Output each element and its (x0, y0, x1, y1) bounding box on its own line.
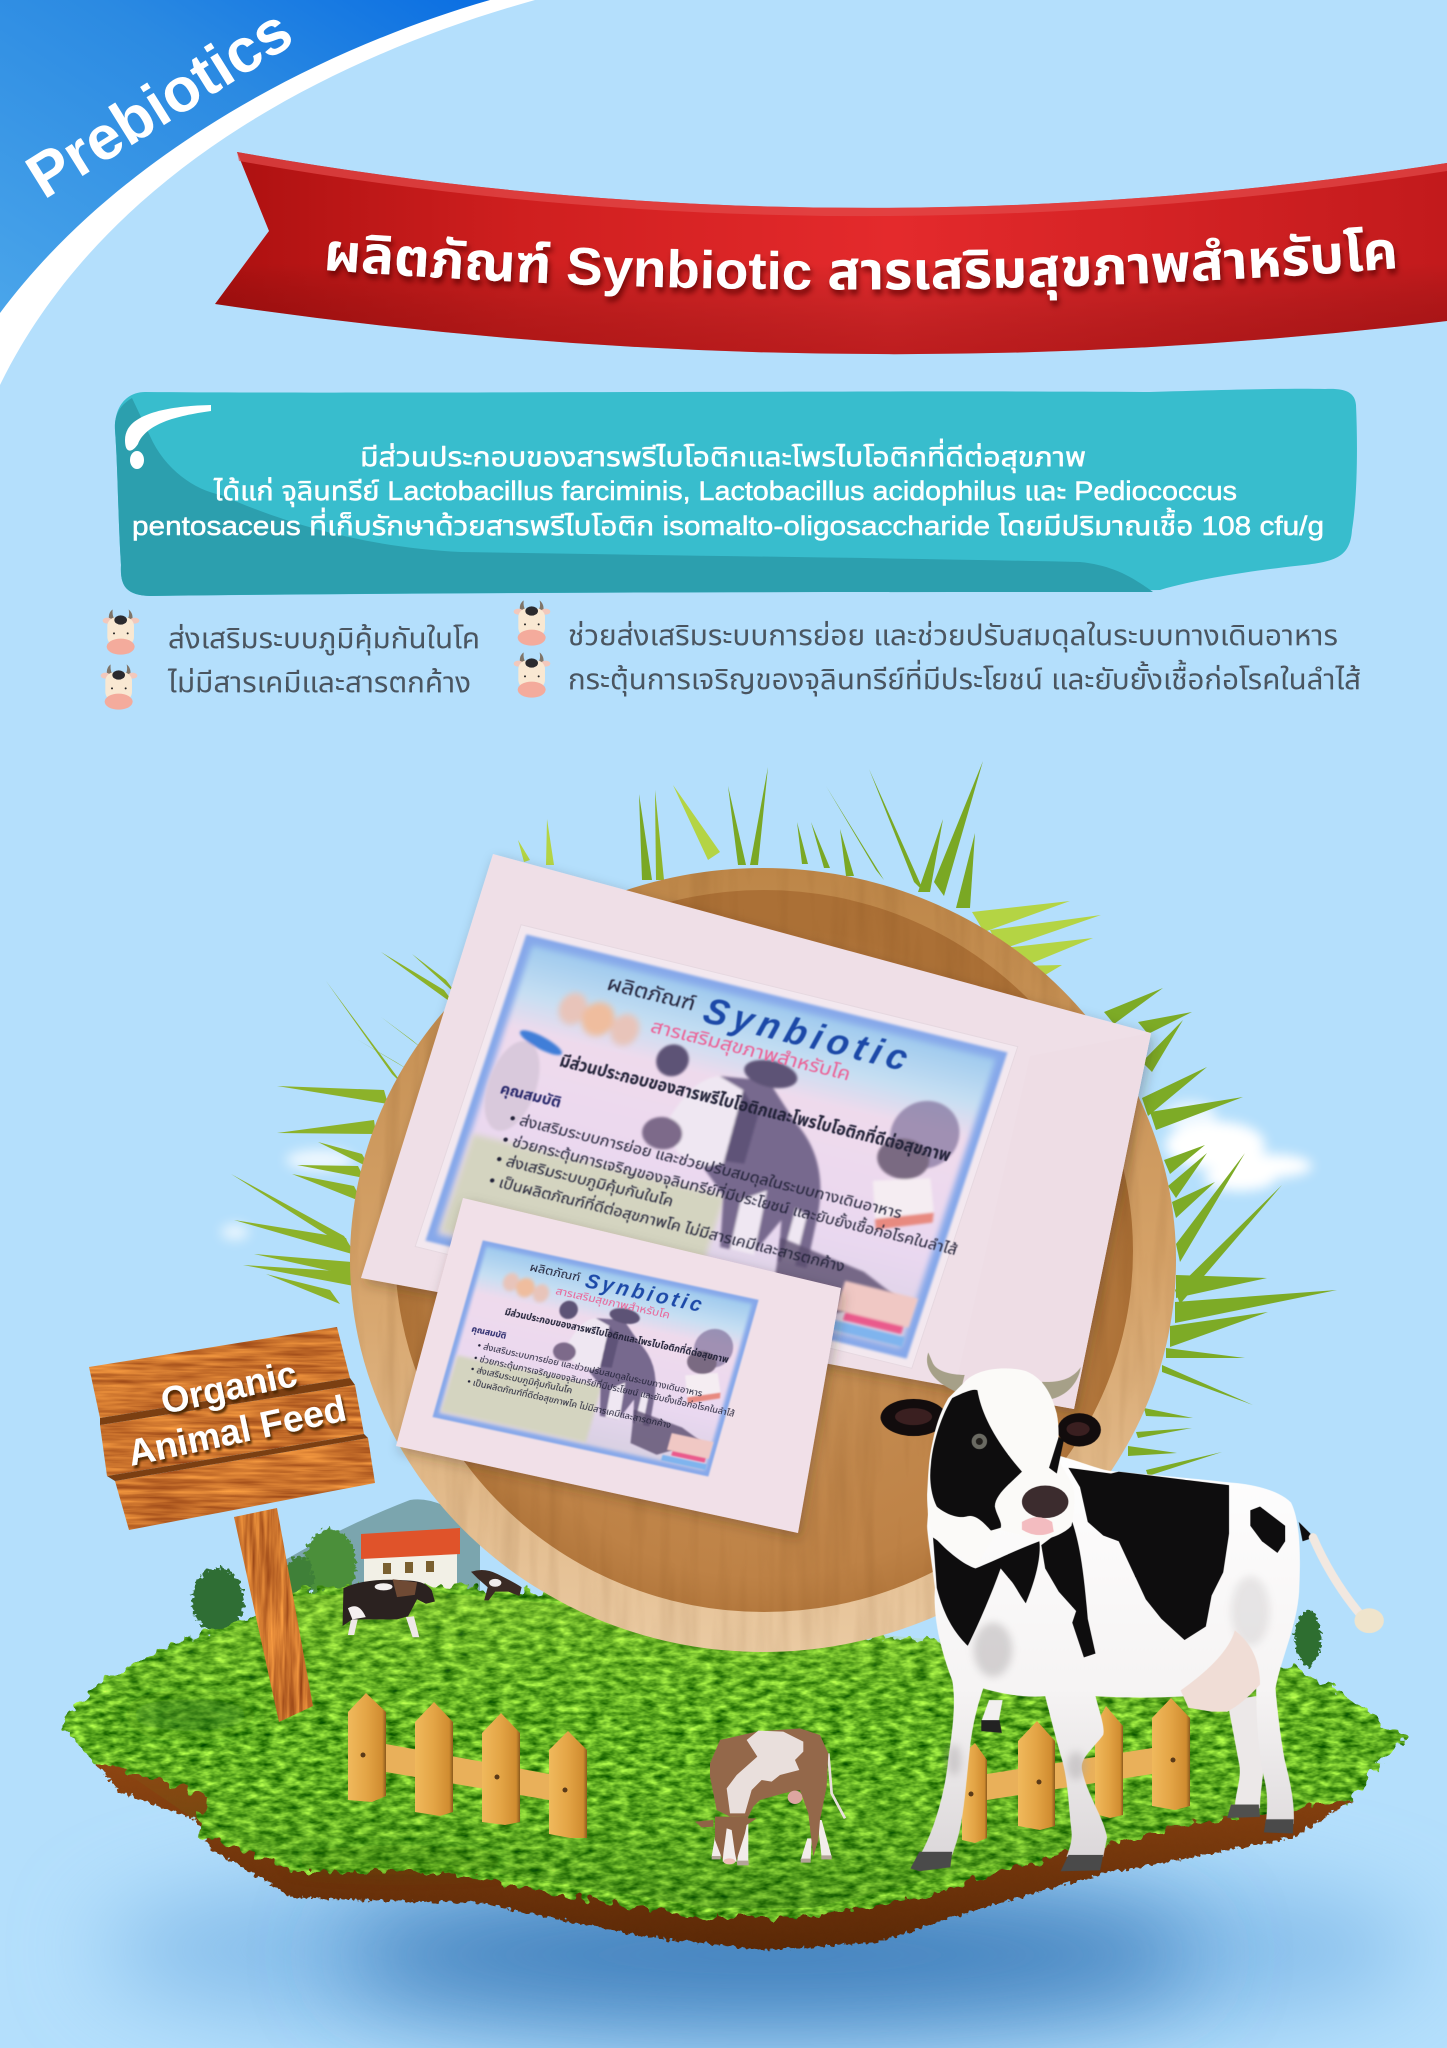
panel shaded fold (115, 398, 1153, 596)
grass spikes behind plate (231, 761, 1337, 1476)
cow head (881, 1352, 1101, 1566)
label text: • ส่งเสริมระบบการย่อย และช่วยปรับสมดุลในระบบทางเดินอาหาร (507, 1109, 905, 1223)
description text: ได้แก่ จุลินทรีย์ Lactobacillus farciminis, Lactobacillus acidophilus และ Pediococcus (213, 476, 1237, 507)
hooves (910, 1819, 1294, 1871)
bullet text 1: ส่งเสริมระบบภูมิคุ้มกันในโค (168, 623, 480, 656)
icon: cow face bullet 2 (101, 664, 137, 710)
label text: สารเสริมสุขภาพสำหรับโค (648, 1016, 853, 1085)
label text: คุณสมบัติ (498, 1081, 563, 1112)
top spikes (639, 761, 983, 908)
label text: • ช่วยกระตุ้นการเจริญของจุลินทรีย์ที่มีประโยชน์ และยับยั้งเชื้อก่อโรคในลำไส้ (500, 1129, 961, 1259)
small label text: คุณสมบัติ (470, 1324, 508, 1341)
tail (1299, 1522, 1384, 1633)
grass shading (100, 1592, 1395, 1908)
peach pills small (499, 1271, 553, 1304)
board gaps (100, 1378, 368, 1481)
sign post (234, 1508, 313, 1722)
sign text: Animal Feed (124, 1388, 350, 1474)
background hill, house and trees (192, 1499, 480, 1632)
label artwork: large sachet (415, 925, 1024, 1370)
grazing brown cow (695, 1728, 845, 1865)
sign text: Organic (157, 1353, 301, 1422)
banner title text: ผลิตภัณฑ์ Synbiotic สารเสริมสุขภาพสำหรับโค (326, 226, 1400, 308)
small label text: มีส่วนประกอบของสารพรีไบโอติกและโพรไบโอติกที่ดีต่อสุขภาพ (503, 1304, 731, 1366)
label artwork: small sachet (433, 1240, 766, 1478)
fence: left (348, 1693, 587, 1838)
small label text: สารเสริมสุขภาพสำหรับโค (554, 1285, 671, 1321)
grass surface (62, 1586, 1405, 1917)
icon: cow face bullet 4 (514, 652, 550, 698)
small label text (456, 1249, 765, 1442)
label text: ผลิตภัณฑ์ (604, 973, 698, 1016)
peach pills (552, 990, 646, 1049)
fence: right (962, 1698, 1190, 1843)
island shadow (100, 1855, 1420, 2045)
label text: • ส่งเสริมระบบภูมิคุ้มกันในโค (494, 1150, 676, 1211)
small label text: ผลิตภัณฑ์ (528, 1261, 582, 1284)
grassy island with soil (62, 1586, 1405, 1950)
label text (469, 949, 1018, 1300)
fence rails right (987, 1748, 1152, 1800)
coloured swatches (824, 1280, 918, 1347)
description text (132, 438, 1324, 541)
body shading (947, 1576, 1270, 1780)
cow photo on label (604, 1034, 867, 1268)
right-side decoration small (623, 1317, 738, 1464)
distant cow far (471, 1570, 522, 1600)
product sachet: large (361, 854, 1151, 1409)
tree right (1295, 1610, 1321, 1666)
small label text: • เป็นผลิตภัณฑ์ที่ดีต่อสุขภาพโค ไม่มีสารเคมีและสารตกค้าง (466, 1375, 673, 1430)
small label text: Synbiotic (583, 1270, 705, 1317)
right spikes (1104, 988, 1337, 1476)
label text: มีส่วนประกอบของสารพรีไบโอติกและโพรไบโอติกที่ดีต่อสุขภาพ (557, 1049, 954, 1166)
clouds (221, 1101, 1312, 1240)
bullet text 4: กระตุ้นการเจริญของจุลินทรีย์ที่มีประโยชน์ และยับยั้งเชื้อก่อโรคในลำไส้ (568, 659, 1361, 696)
small label swatches (661, 1432, 713, 1470)
right-side decoration (759, 1077, 970, 1337)
soil layer (91, 1758, 1352, 1950)
corner label: Prebiotics: Prebiotics (15, 0, 304, 212)
main holstein cow (881, 1352, 1384, 1871)
description text: มีส่วนประกอบของสารพรีไบโอติกและโพรไบโอติกที่ดีต่อสุขภาพ (360, 438, 1086, 473)
fence rails left (386, 1744, 549, 1800)
corner ribbon (0, 0, 535, 385)
label text: • เป็นผลิตภัณฑ์ที่ดีต่อสุขภาพโค ไม่มีสารเคมีและสารตกค้าง (487, 1169, 848, 1276)
small label text: • ส่งเสริมระบบการย่อย และช่วยปรับสมดุลในระบบทางเดินอาหาร (476, 1340, 704, 1399)
icon: cow face bullet 3 (514, 600, 550, 646)
blue splash (474, 1022, 569, 1140)
second cow legs behind (981, 1700, 1003, 1721)
udder (1181, 1630, 1260, 1712)
icon: cow face bullet 1 (103, 609, 139, 655)
cow photo on small label (533, 1295, 680, 1426)
farmhouse (361, 1528, 460, 1590)
distant cow (343, 1579, 435, 1637)
black patches (933, 1468, 1285, 1657)
body (921, 1441, 1300, 1857)
bullet text 3: ช่วยส่งเสริมระบบการย่อย และช่วยปรับสมดุลในระบบทางเดินอาหาร (568, 620, 1338, 652)
left spikes (231, 952, 458, 1304)
panel: description (115, 389, 1357, 596)
icon: quotation mark (125, 405, 211, 469)
title banner (215, 152, 1447, 354)
small label text: • ส่งเสริมระบบภูมิคุ้มกันในโค (469, 1364, 574, 1396)
sign boards (89, 1327, 375, 1530)
description text: pentosaceus ที่เก็บรักษาด้วยสารพรีไบโอติก isomalto-oligosaccharide โดยมีปริมาณเชื้อ 108 cfu/g (132, 507, 1324, 541)
label text: Synbiotic (699, 990, 913, 1078)
product sachet: small (396, 1198, 841, 1533)
signpost (89, 1327, 375, 1722)
far legs (1227, 1696, 1264, 1808)
wooden plate (350, 868, 1176, 1652)
small label text: • ช่วยกระตุ้นการเจริญของจุลินทรีย์ที่มีประโยชน์ และยับยั้งเชื้อก่อโรคในลำไส้ (473, 1352, 736, 1419)
bullet text 2: ไม่มีสารเคมีและสารตกค้าง (167, 667, 471, 699)
